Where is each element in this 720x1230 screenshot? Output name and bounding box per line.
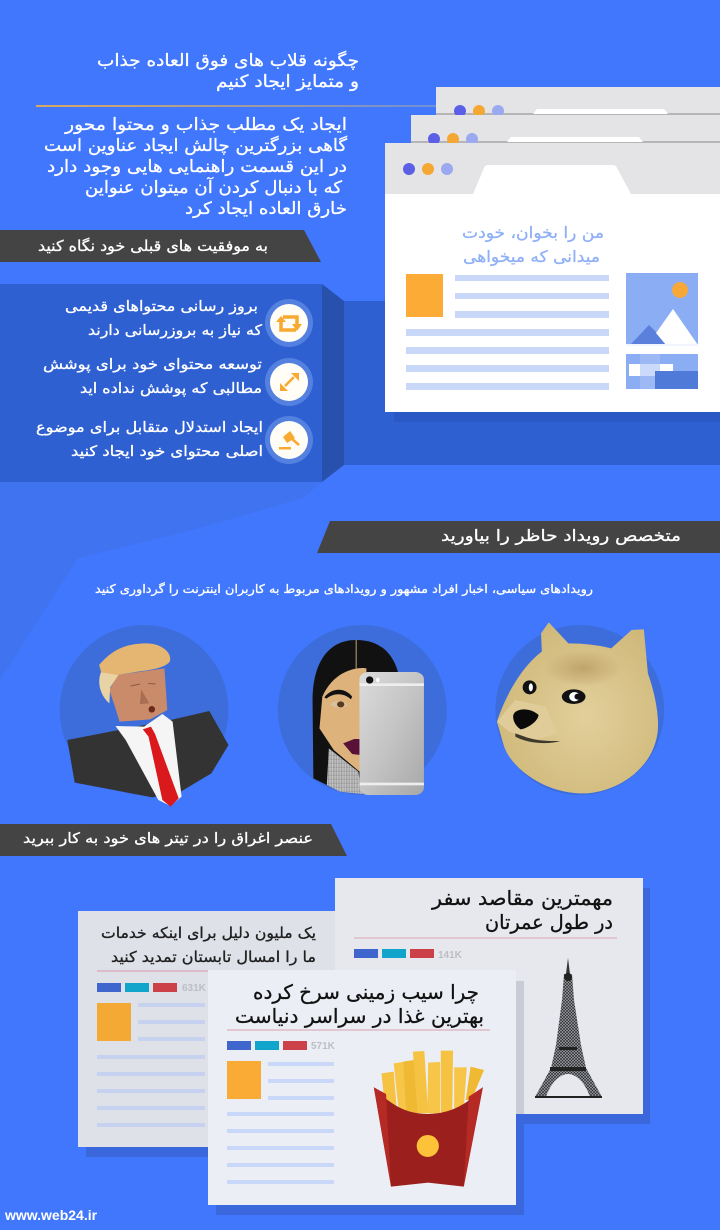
illustration: selfie girl (278, 625, 447, 795)
tie (143, 727, 179, 807)
article thumbnail (97, 1003, 131, 1041)
sweater (327, 748, 362, 794)
card headline (101, 924, 316, 966)
illustration: doge (495, 622, 664, 795)
article card: fries (208, 970, 524, 1215)
current events description: رویدادهای سیاسی، اخبار افراد مشهور و رویدادهای مربوط به کاربران اینترنت را گرداوری کنید (95, 582, 593, 597)
panel side face (322, 284, 344, 482)
heading bar: past success (0, 230, 321, 262)
browser headline (462, 223, 604, 267)
illustration: politician (60, 625, 228, 807)
tip 1: که نیاز به بروزرسانی دارند (88, 323, 262, 339)
heading bar: current events: متخصص رویداد حاظر را بیاورید (441, 526, 681, 546)
intro paragraph: که با دنبال کردن آن میتوان عنواین (85, 176, 343, 198)
side hair (99, 672, 120, 703)
card headline (431, 886, 613, 934)
share bars: 141K (438, 950, 463, 961)
tip 1 (65, 299, 313, 347)
title: چگونه قلاب های فوق العاده جذاب (97, 50, 359, 71)
head (497, 622, 658, 793)
image placeholder: mountains (626, 273, 698, 346)
title divider (36, 105, 436, 107)
share bars: 571K (311, 1041, 336, 1052)
footer url: www.web24.ir (4, 1207, 98, 1223)
mouth (515, 733, 560, 743)
heading bar: exaggeration: عنصر اغراق را در تیتر های خود به کار ببرید (23, 831, 313, 847)
heading bar: past success: به موفقیت های قبلی خود نگاه کنید (38, 237, 268, 255)
hair (313, 640, 399, 788)
heading bar: exaggeration (0, 824, 347, 856)
nose (513, 709, 539, 729)
title: و متمایز ایجاد کنیم (216, 72, 359, 92)
brow and eye (324, 690, 352, 699)
card headline: ما را امسال تابستان تمدید کنید (111, 948, 316, 966)
card headline: یک ملیون دلیل برای اینکه خدمات (101, 924, 316, 942)
icon: retweet (276, 316, 302, 331)
dark band behind browsers (344, 301, 720, 465)
browser shadow (394, 412, 720, 422)
icon: expand arrows (280, 373, 299, 391)
lips (343, 739, 360, 755)
article card: summer (78, 911, 335, 1157)
muzzle (497, 700, 557, 740)
article card: travel (335, 878, 650, 1124)
shirt (115, 714, 182, 806)
face (109, 668, 167, 722)
browser window: middle (411, 115, 720, 145)
tip 1: بروز رسانی محتواهای قدیمی (65, 299, 258, 315)
article text lines (97, 1003, 205, 1127)
phone (359, 672, 424, 795)
tip 2: مطالبی که پوشش نداده اید (80, 381, 262, 397)
article text lines (227, 1062, 334, 1184)
hair (99, 643, 170, 675)
tip 2: توسعه محتوای خود برای پوشش (43, 357, 262, 373)
icon: eiffel tower (535, 958, 602, 1098)
face (319, 668, 366, 775)
share bars (354, 949, 463, 961)
card headline: در طول عمرتان (485, 910, 613, 934)
article thumbnail (406, 274, 443, 317)
tip 3: اصلی محتوای خود ایجاد کنید (71, 444, 263, 460)
browser tab (473, 165, 631, 194)
card headline (235, 980, 484, 1028)
share bars: 631K (182, 983, 207, 994)
article thumbnail (227, 1061, 261, 1099)
intro paragraph (44, 115, 348, 219)
tip 2 (43, 357, 313, 406)
background facet (0, 482, 322, 680)
card headline: مهمترین مقاصد سفر (431, 886, 613, 910)
browser window: front (385, 143, 720, 412)
article text lines (406, 275, 609, 390)
forehead shade (544, 650, 621, 687)
tip 3: ایجاد استدلال متقابل برای موضوع (36, 420, 263, 436)
image placeholder: mosaic (626, 354, 698, 389)
panel: tips (0, 284, 344, 482)
intro paragraph: در این قسمت راهنمایی هایی وجود دارد (47, 157, 347, 177)
suit (67, 711, 228, 797)
card headline: بهترین غذا در سراسر دنیاست (235, 1004, 484, 1028)
title (97, 50, 359, 92)
intro paragraph: خارق العاده ایجاد کرد (185, 199, 347, 219)
icon: french fries (374, 1051, 484, 1187)
intro paragraph: ایجاد یک مطلب جذاب و محتوا محور (64, 115, 347, 135)
icon: gavel (279, 431, 299, 450)
eyes (523, 680, 537, 694)
browser headline: میدانی که میخواهی (463, 247, 600, 267)
browser headline: من را بخوان، خودت (462, 223, 604, 243)
share bars (97, 983, 207, 994)
browser window: back (436, 87, 720, 117)
heading bar: current events (317, 521, 720, 553)
intro paragraph: گاهی بزرگترین چالش ایجاد عناوین است (44, 135, 348, 156)
card headline: چرا سیب زمینی سرخ کرده (253, 980, 479, 1004)
tip 3 (36, 416, 313, 464)
share bars (227, 1041, 336, 1052)
